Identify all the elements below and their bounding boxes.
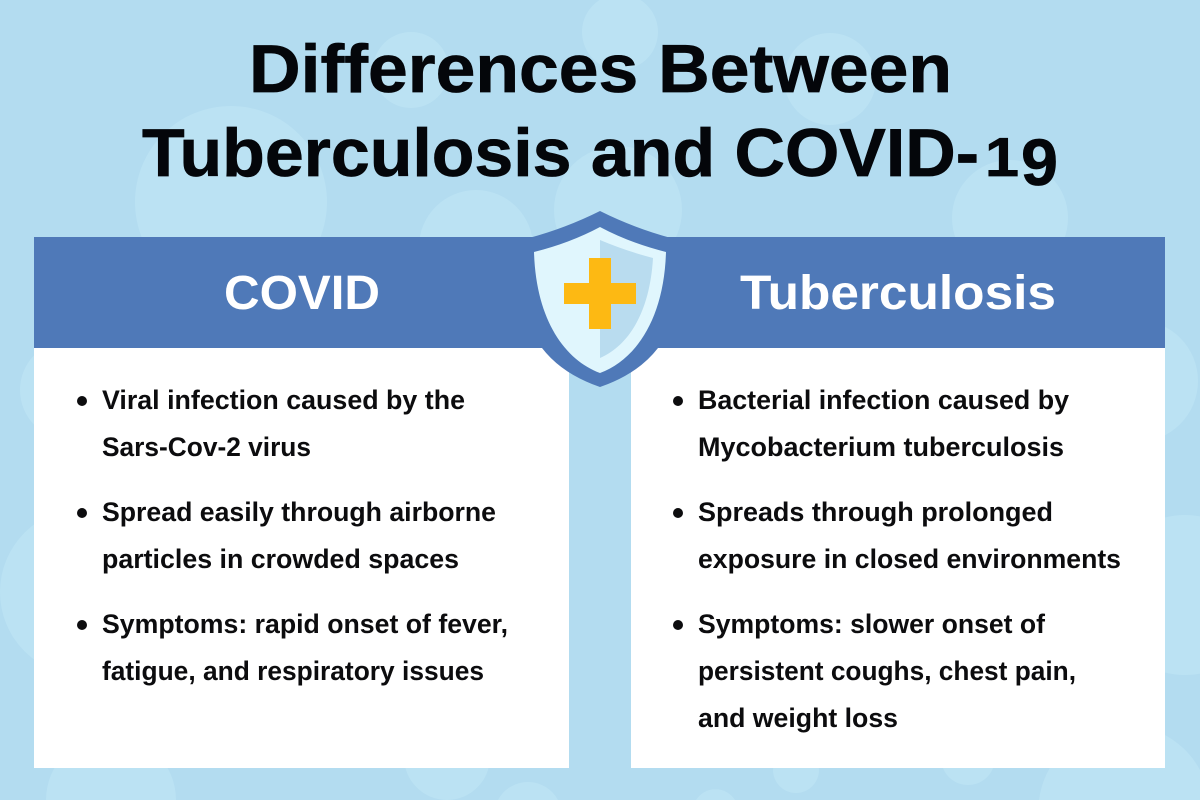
COVID heading: COVID	[224, 267, 380, 320]
title: 1	[985, 126, 1019, 188]
Tuberculosis bullet: symptoms	[673, 609, 1076, 733]
Tuberculosis bullet: cause	[673, 385, 1069, 462]
COVID body card	[34, 348, 569, 768]
Tuberculosis bullet: symptoms: and weight loss	[698, 703, 898, 733]
icon: shield with plus	[529, 211, 671, 387]
Tuberculosis bullet: spread: exposure in closed environments	[698, 544, 1121, 574]
Tuberculosis bullet: spread: Spreads through prolonged	[698, 497, 1053, 527]
COVID bullet: symptoms: Symptoms: rapid onset of fever,	[102, 609, 508, 639]
Tuberculosis bullet: cause: Bacterial infection caused by	[698, 385, 1069, 415]
COVID bullet: cause	[77, 385, 465, 462]
plus sign	[564, 258, 636, 329]
title: 9	[1021, 125, 1058, 199]
COVID bullet: cause: Sars-Cov-2 virus	[102, 432, 311, 462]
Tuberculosis body card	[631, 348, 1165, 768]
COVID bullet: cause: Viral infection caused by the	[102, 385, 465, 415]
COVID bullet: symptoms	[77, 609, 508, 686]
COVID bullet: spread: Spread easily through airborne	[102, 497, 496, 527]
panel: COVID	[34, 237, 569, 768]
Tuberculosis bullet: symptoms: Symptoms: slower onset of	[698, 609, 1046, 639]
panel: Tuberculosis	[631, 237, 1165, 768]
title: Tuberculosis and COVID-	[142, 115, 979, 191]
shield shaded half	[600, 240, 653, 358]
COVID bullet: spread	[77, 497, 496, 574]
Tuberculosis header band	[631, 237, 1165, 348]
title: Differences Between	[249, 31, 952, 107]
shield inner	[534, 227, 666, 373]
title	[142, 31, 1058, 199]
Tuberculosis bullet: symptoms: persistent coughs, chest pain,	[698, 656, 1076, 686]
Tuberculosis bullet: cause: Mycobacterium tuberculosis	[698, 432, 1064, 462]
COVID bullet: symptoms: fatigue, and respiratory issues	[102, 656, 484, 686]
Tuberculosis heading: Tuberculosis	[740, 267, 1056, 320]
Tuberculosis bullet: spread	[673, 497, 1121, 574]
COVID bullet: spread: particles in crowded spaces	[102, 544, 459, 574]
COVID header band	[34, 237, 569, 348]
shield outer	[529, 211, 671, 387]
